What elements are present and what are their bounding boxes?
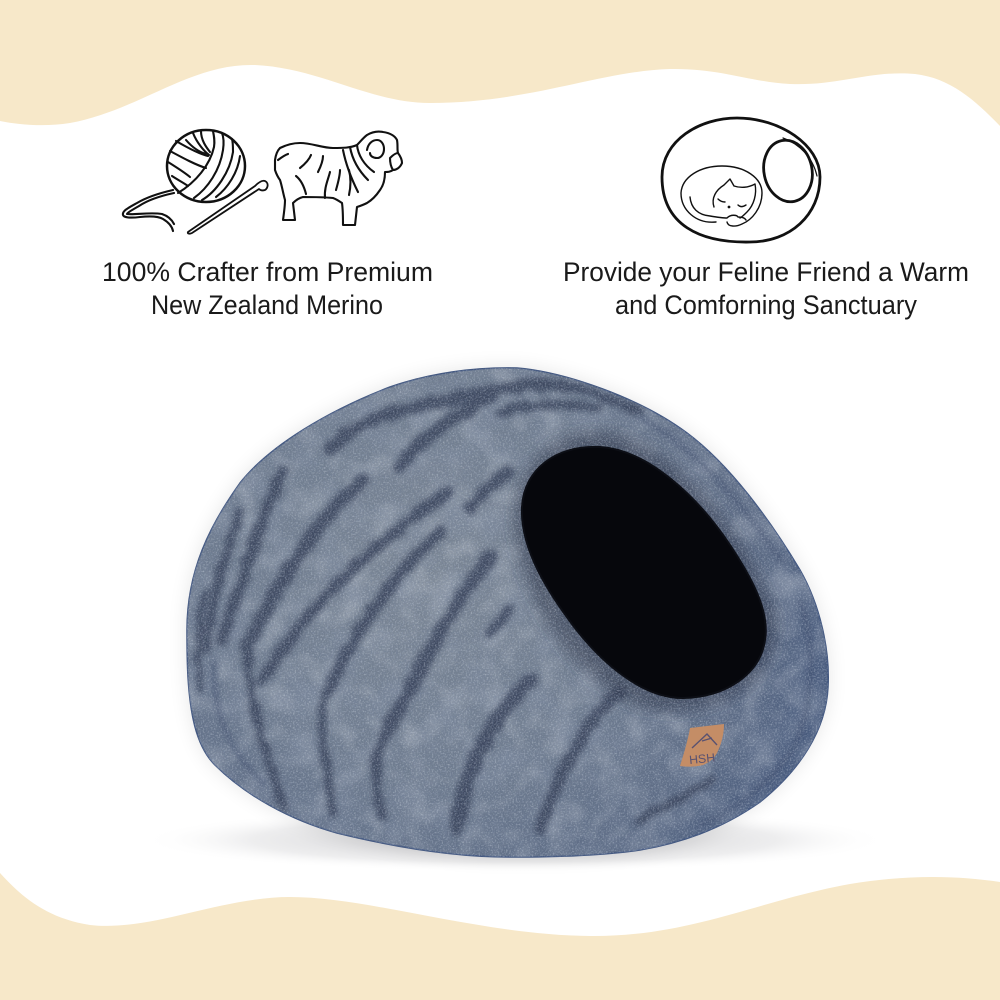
felt body: [187, 368, 828, 857]
leather tag: HSH: [688, 750, 716, 767]
background wave: top: [0, 0, 1000, 126]
icon: cat cave with sleeping cat: [662, 118, 820, 242]
dark halo around entrance: [514, 432, 777, 712]
soft halo behind cave: [187, 368, 828, 857]
entrance hole: [522, 447, 766, 698]
text: sanctuary caption: and Comforning Sanctuary: [615, 290, 918, 320]
text: merino caption: New Zealand Merino: [151, 290, 383, 320]
product photo: felt cat cave: [170, 350, 850, 870]
felt speckle texture: [187, 368, 828, 857]
text: sanctuary caption: Provide your Feline Friend a Warm: [563, 257, 969, 287]
icon: merino sheep: [275, 132, 402, 225]
text: sanctuary caption: [563, 257, 969, 320]
ground shadow: [140, 808, 890, 872]
icon: yarn ball and crochet hook: [123, 130, 268, 234]
background wave: bottom: [0, 873, 1000, 1000]
leather tag: [680, 724, 724, 767]
rim ridges: [214, 417, 811, 825]
felt mottling and stripes: [187, 368, 828, 857]
text: merino caption: 100% Crafter from Premium: [102, 257, 433, 287]
text: merino caption: [102, 257, 433, 320]
